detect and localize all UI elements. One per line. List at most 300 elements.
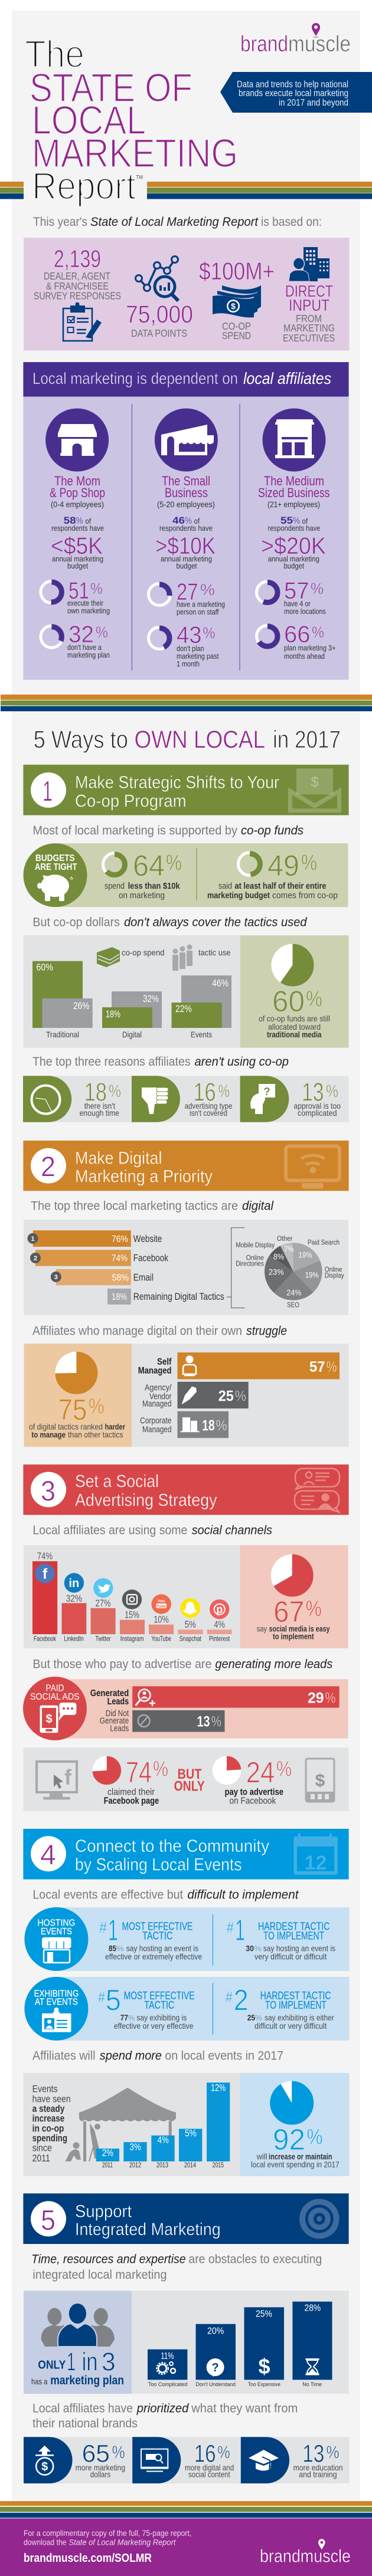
column: mom and pop shop: (0-4 employees) <box>51 500 104 509</box>
stat: co-op spend: $100M+ <box>199 257 275 285</box>
want: more marketing dollars <box>24 2437 125 2483</box>
stat: direct input: DIRECT <box>285 282 333 300</box>
bar chart: top tactics: 74% <box>112 1254 128 1264</box>
bars: traditional: 60% <box>37 962 53 973</box>
bar: instagram <box>120 1589 145 1643</box>
column: mom and pop shop: & Pop Shop <box>50 485 105 500</box>
subheading: tactics used: But co-op dollars <box>32 916 120 929</box>
text: download call to action: For a complimentary copy of the full, 75-page report, <box>24 2528 191 2538</box>
icon: tablet with dollar <box>306 1759 334 1802</box>
panel: 92 percent increase or maintain <box>240 2073 350 2176</box>
bar: pinterest: p <box>216 1604 223 1615</box>
panel: only 1 in 3 <box>24 2291 132 2394</box>
subheading: co-op funds: co-op funds <box>241 824 304 837</box>
stat: 27 percent: person on staff <box>177 607 219 616</box>
stat: #1 hardest tactic: 1 <box>235 1914 245 1947</box>
section 3 banner: Advertising Strategy <box>75 1490 217 1510</box>
subheading: spend more: Affiliates will <box>32 2049 96 2063</box>
stat: co-op spend: SPEND <box>222 330 251 341</box>
bar chart: top tactics: Website <box>133 1233 162 1244</box>
bar: generated leads <box>90 1686 340 1708</box>
panel: 92 percent increase or maintain: % <box>307 2125 322 2149</box>
subheading: prioritized: their national brands <box>32 2417 138 2430</box>
bar chart: top tactics: Email <box>133 1272 154 1283</box>
bar: snapchat: 5% <box>185 1619 196 1630</box>
subheading: digital struggle: struggle <box>246 1324 287 1338</box>
panel: exhibiting at events <box>24 1977 349 2041</box>
stat: #1 hardest tactic: very difficult or difficult <box>254 1951 327 1961</box>
bar: too expensive: 25% <box>256 2309 272 2319</box>
heading: local affiliates: Local marketing is dependent on <box>32 369 238 387</box>
stat: 66 percent: months ahead <box>284 652 325 661</box>
panel: top tactics <box>24 1220 348 1315</box>
stat: #5 most effective <box>98 1983 195 2030</box>
pie: remaining digital tactics: Mobile Display <box>236 1241 275 1249</box>
column: mom and pop shop: <$5K <box>51 533 103 559</box>
icon: question bubble: ? <box>211 2361 219 2374</box>
bars: events: Events <box>191 1030 212 1039</box>
column: medium sized business <box>256 408 335 661</box>
bar: too complicated <box>148 2350 187 2388</box>
stat: 43 percent: 43 <box>177 622 202 648</box>
reason: not enough time: % <box>109 1082 121 1101</box>
stat: 51 percent: % <box>90 580 103 597</box>
stat: #1 most effective: # <box>99 1918 107 1936</box>
stat: #2 hardest tactic: TO IMPLEMENT <box>265 1999 327 2011</box>
section 1 banner: 1 <box>43 776 53 807</box>
subheading: reasons not using co-op: aren't using co-op <box>195 1055 289 1069</box>
text: steady increase: have seen <box>32 2093 71 2104</box>
column: small business: respondents have <box>159 524 213 533</box>
panel: paid social ads <box>23 1677 348 1740</box>
section 5 banner: 5 <box>41 2205 56 2236</box>
subheading: tactics used: don't always cover the tactics used <box>124 916 308 929</box>
pie: remaining digital tactics: Other <box>277 1234 292 1243</box>
stat: 64 percent <box>103 849 182 901</box>
badge: hosting events: HOSTING <box>38 1918 75 1928</box>
stat: #5 most effective: % <box>128 2013 135 2022</box>
stat: 74 percent claimed <box>92 1756 168 1806</box>
column: medium sized business: (21+ employees) <box>267 500 320 509</box>
title: STATE OF <box>30 65 192 110</box>
subheading: co-op funds: Most of local marketing is supported by <box>32 824 237 837</box>
bar chart: co-op spending by year: 2013 <box>156 2162 168 2169</box>
icon: piggy bank <box>37 875 73 901</box>
subheading: social channels <box>32 1524 272 1537</box>
stat: 32 percent: marketing plan <box>67 650 110 659</box>
section 5 banner: Support <box>75 2202 132 2221</box>
stat: direct input: MARKETING <box>283 322 335 334</box>
column: mom and pop shop: of <box>85 517 91 525</box>
stat: 32 percent: % <box>96 623 108 641</box>
badge: hosting events: EVENTS <box>41 1927 72 1937</box>
title: The <box>25 32 84 75</box>
reason: advertising type not covered: isn't covered <box>190 1108 227 1118</box>
stat: 32 percent: don't have a <box>67 643 102 652</box>
want: more marketing dollars: more marketing <box>76 2463 125 2472</box>
panel: 75 percent harder to manage: of digital tactics ranked <box>29 1422 103 1431</box>
badge: budgets are tight: ARE TIGHT <box>35 862 77 872</box>
stat: #1 most effective <box>99 1914 202 1961</box>
bar: agency managed: Agency/ <box>145 1384 172 1393</box>
callout banner: in 2017 and beyond <box>279 98 348 108</box>
icon: tablet with dollar: $ <box>315 1771 325 1790</box>
subheading: obstacles <box>31 2253 322 2282</box>
stat: #2 hardest tactic: difficult or very difficult <box>254 2021 327 2030</box>
bar: agency managed: 25 <box>218 1388 234 1405</box>
bar: youtube <box>149 1594 174 1643</box>
bar: don't understand <box>196 2324 236 2388</box>
bars: digital: Digital <box>122 1030 142 1039</box>
stat: #5 most effective: # <box>98 1988 105 2006</box>
icon: no symbol <box>138 1715 150 1727</box>
stat: #5 most effective: 77 <box>120 2013 128 2022</box>
want: more education and training: % <box>326 2443 340 2462</box>
bar chart: top tactics: 3 <box>54 1274 58 1281</box>
pie: remaining digital tactics: 7% <box>284 1244 293 1254</box>
reason: advertising type not covered: % <box>218 1082 230 1101</box>
want: more education and training: 13 <box>302 2439 324 2467</box>
bar: too complicated: 11% <box>161 2351 174 2361</box>
pie: remaining digital tactics: 8% <box>273 1252 284 1261</box>
bar: snapchat <box>178 1598 203 1643</box>
icon: hourglass <box>306 2358 319 2375</box>
icon: pen <box>182 1386 197 1405</box>
panel: only 1 in 3: 1 <box>67 2347 76 2376</box>
bar: facebook: 74% <box>37 1550 53 1562</box>
bar: agency managed: Managed <box>142 1399 171 1409</box>
stat: 24 percent pay: 24 <box>246 1756 275 1789</box>
stat: direct input: INPUT <box>289 296 329 314</box>
reason: approval too complicated: % <box>326 1082 338 1101</box>
bar: youtube: YouTube <box>151 1635 171 1643</box>
illustration: event tent <box>65 2088 176 2161</box>
icon: executive and buildings <box>289 247 329 281</box>
bars: digital: 18% <box>106 1008 120 1020</box>
stat: data points: DATA POINTS <box>131 327 187 339</box>
icon: calendar <box>293 1834 338 1875</box>
text: steady increase: a steady <box>32 2103 65 2114</box>
bar: don't understand: 20% <box>207 2326 224 2336</box>
pie: 92 percent <box>270 2081 314 2125</box>
subheading: spend more: on local events in 2017 <box>165 2049 283 2063</box>
panel: who manages digital <box>132 1343 349 1447</box>
bar: corporate managed: Corporate <box>140 1416 171 1425</box>
panel: obstacles bar chart <box>132 2291 349 2394</box>
bars: traditional: Traditional <box>46 1030 79 1039</box>
pie: remaining digital tactics: Online <box>246 1254 264 1262</box>
panel: only 1 in 3: ONLY <box>38 2359 66 2372</box>
subheading: prioritized: Local affiliates have <box>32 2402 133 2416</box>
stat: direct input: EXECUTIVES <box>283 332 335 344</box>
want: more digital and social content: more digital and <box>185 2463 234 2472</box>
stripes: footer <box>0 2501 372 2518</box>
stat: #5 most effective: 5 <box>106 1983 121 2016</box>
pie: remaining digital tactics: Paid Search <box>308 1238 340 1247</box>
reason: approval too complicated <box>240 1076 341 1122</box>
icon: chat bubbles <box>295 1468 340 1512</box>
column: medium sized business: of <box>302 517 308 525</box>
bar chart: top tactics: Remaining Digital Tactics <box>133 1291 224 1302</box>
bar: did not generate leads: Did Not <box>106 1709 129 1719</box>
stat: 49 percent: 49 <box>267 849 299 882</box>
icon: facebook monitor <box>35 1762 78 1800</box>
panel: 60 percent traditional media: % <box>306 987 322 1011</box>
icon: money stack: $ <box>231 301 236 311</box>
bar: did not generate leads: 13 <box>197 1714 210 1730</box>
section 2 banner: Marketing a Priority <box>75 1167 213 1186</box>
legend: co-op spend: co-op spend <box>122 948 164 957</box>
stat: survey responses: DEALER, AGENT <box>44 270 110 282</box>
stat: #2 hardest tactic: HARDEST TACTIC <box>260 1990 331 2002</box>
panel: 60 percent traditional media: allocated toward <box>268 1022 321 1031</box>
bar: don't understand: Don't Understand <box>196 2381 236 2388</box>
want: more marketing dollars: $ <box>41 2460 48 2473</box>
column: small business: Business <box>165 485 208 500</box>
section 5 banner <box>23 2193 349 2244</box>
stat: #5 most effective: MOST EFFECTIVE <box>124 1990 195 2002</box>
icon: three people <box>41 2304 115 2347</box>
icon: corporate building <box>180 1417 199 1432</box>
subheading: generating leads: generating more leads <box>215 1657 333 1671</box>
stat: #1 most effective: MOST EFFECTIVE <box>122 1921 192 1933</box>
section 3 banner <box>23 1464 349 1515</box>
bar: youtube: Tube <box>156 1605 166 1609</box>
section 3 banner: Set a Social <box>75 1472 159 1491</box>
want: more digital and social content <box>132 2437 234 2483</box>
text: steady increase: in co-op <box>32 2122 64 2134</box>
panel: facebook claimed vs paid <box>23 1747 349 1811</box>
stat: survey responses: & FRANCHISEE <box>46 280 109 292</box>
stat: 51 percent: 51 <box>68 578 89 604</box>
stat: 74 percent claimed: 74 <box>126 1756 152 1789</box>
reason: advertising type not covered <box>132 1076 233 1122</box>
stat: 43 percent: don't plan <box>177 644 204 653</box>
text: download call to action: brandmuscle.com/SOLMR <box>24 2552 152 2565</box>
stat: #1 most effective: say hosting an event is <box>126 1943 198 1953</box>
subheading: digital tactics: digital <box>242 1200 274 1213</box>
bar: self managed: Self <box>157 1357 172 1367</box>
bar chart: co-op spending by year: 2015 <box>213 2162 224 2169</box>
panel: only 1 in 3: in <box>82 2347 98 2376</box>
icon: person at laptop <box>183 1355 196 1376</box>
badge: budgets are tight: BUDGETS <box>35 853 75 863</box>
subheading: prioritized: what they want from <box>191 2402 298 2416</box>
bar: twitter: 27% <box>96 1598 111 1609</box>
legend: tactic use <box>172 945 231 971</box>
bar chart: top tactics: 58% <box>112 1273 129 1283</box>
bar: facebook: Facebook <box>34 1635 57 1643</box>
section 1 banner <box>23 765 349 815</box>
stat: #1 most effective: % <box>116 1944 124 1953</box>
column: mom and pop shop: respondents have <box>51 524 104 533</box>
callout banner <box>220 72 372 113</box>
bar chart: co-op spending by year: 3% <box>129 2141 141 2153</box>
want: more marketing dollars: % <box>112 2443 125 2462</box>
bars: events: 46% <box>212 978 229 989</box>
bars: digital <box>102 991 162 1039</box>
icon: facebook monitor: f <box>64 1765 72 1789</box>
heading: 5 ways to own local <box>34 725 341 753</box>
column: medium sized business: 55 <box>280 515 293 526</box>
stat: 64 percent: less than $10k <box>128 881 180 891</box>
logo: brandmuscle <box>240 23 351 57</box>
reason: not enough time: there isn't <box>84 1101 115 1110</box>
text: steady increase: 2011 <box>32 2153 50 2164</box>
stat: #5 most effective: effective or very effective <box>114 2021 194 2030</box>
logo: brandmuscle white: brandmuscle <box>260 2545 351 2566</box>
bar: pinterest <box>207 1599 232 1643</box>
panel: 75 percent harder to manage: to manage <box>31 1430 66 1440</box>
bar: corporate managed: % <box>216 1418 227 1434</box>
title <box>25 32 238 208</box>
column: mom and pop shop: annual marketing <box>52 554 103 563</box>
stat: #1 hardest tactic: 30 <box>246 1943 254 1953</box>
intro sentence: State of Local Marketing Report <box>90 215 259 229</box>
stat: 32 percent <box>41 622 110 659</box>
subheading: reasons not using co-op: The top three reasons affiliates <box>32 1055 191 1069</box>
reason: approval too complicated: 13 <box>302 1078 324 1107</box>
badge: exhibiting at events: EXHIBITING <box>34 1989 79 1999</box>
stat: data points: 75,000 <box>126 300 193 328</box>
column: mom and pop shop: budget <box>67 561 88 570</box>
bar: self managed: Managed <box>138 1366 171 1376</box>
pie: remaining digital tactics: Directories <box>236 1260 264 1268</box>
stat: co-op spend: CO-OP <box>222 320 251 332</box>
bar: no time: 28% <box>305 2303 321 2313</box>
pie: 67 percent <box>271 1555 314 1597</box>
bar: linkedin: in <box>69 1577 79 1590</box>
stat: data points <box>126 300 193 339</box>
panel: 67 percent easy to implement: % <box>306 1596 322 1621</box>
column: medium sized business: The Medium <box>264 474 324 488</box>
section 3 banner: 3 <box>41 1476 56 1507</box>
want: more education and training <box>241 2437 343 2483</box>
section 2 banner: 2 <box>41 1151 56 1182</box>
bar: did not generate leads: Generate <box>100 1717 129 1726</box>
stat: #2 hardest tactic: 2 <box>234 1983 249 2016</box>
bar: snapchat: Snapchat <box>180 1635 201 1643</box>
stat: 27 percent: 27 <box>177 579 198 605</box>
bars: events: 22% <box>175 1003 192 1014</box>
stat: #2 hardest tactic: say exhibiting is either <box>265 2013 334 2022</box>
callout banner: Data and trends to help national <box>237 80 348 90</box>
intro sentence: This year's <box>33 215 87 229</box>
panel: 75 percent harder to manage: harder <box>105 1422 125 1431</box>
section 4 banner: by Scaling Local Events <box>75 1855 242 1875</box>
pie: remaining digital tactics: SEO <box>287 1301 299 1309</box>
bar chart: top tactics: Facebook <box>133 1253 168 1264</box>
bar: too complicated: Too Complicated <box>148 2381 187 2388</box>
header <box>0 23 372 208</box>
reason: not enough time: 18 <box>84 1078 107 1107</box>
bar: self managed: % <box>326 1359 337 1375</box>
bar: facebook <box>32 1550 57 1643</box>
stat: 49 percent: said <box>218 881 232 891</box>
want: more digital and social content: social content <box>188 2470 230 2479</box>
heading: local affiliates: local affiliates <box>243 369 331 387</box>
column: medium sized business: annual marketing <box>268 554 319 563</box>
title: TM <box>136 175 143 180</box>
pie: remaining digital tactics: 19% <box>305 1270 319 1280</box>
panel: 92 percent increase or maintain: 92 <box>273 2123 305 2156</box>
subheading: difficult to implement <box>32 1888 299 1901</box>
panel: 67 percent easy to implement: social media is easy <box>269 1624 330 1634</box>
pie: remaining digital tactics: 24% <box>286 1288 301 1297</box>
logo: brandmuscle: brand <box>240 32 288 57</box>
stat: 57 percent: more locations <box>284 607 326 616</box>
heading: 5 ways to own local: OWN LOCAL <box>135 725 265 753</box>
bar: self managed <box>138 1352 340 1379</box>
column: small business: 46 <box>172 515 185 526</box>
want: more digital and social content: % <box>217 2443 230 2462</box>
column: medium sized business: Sized Business <box>258 485 329 500</box>
bar: pinterest: 4% <box>214 1619 225 1630</box>
panel: business sizes <box>23 397 349 680</box>
legend: co-op spend <box>97 947 164 967</box>
column: small business <box>149 408 225 668</box>
want: more education and training: more education <box>293 2463 343 2472</box>
icon: wifi monitor <box>286 1146 340 1189</box>
bar: agency managed <box>142 1382 249 1409</box>
stat: #5 most effective: TACTIC <box>144 1999 174 2011</box>
stat: survey responses <box>34 245 121 302</box>
panel: what affiliates want <box>24 2437 350 2483</box>
column: mom and pop shop: 58 <box>64 515 76 526</box>
panel: 60 percent traditional media: 60 <box>272 985 305 1018</box>
stat: 57 percent: have 4 or <box>284 599 311 608</box>
panel: three reasons <box>23 1076 349 1122</box>
icon: clipboard <box>63 302 102 341</box>
badge: exhibiting at events: AT EVENTS <box>35 1997 78 2007</box>
bar: no time <box>292 2302 332 2388</box>
section 5 banner: Integrated Marketing <box>75 2220 221 2239</box>
logo: brandmuscle white <box>260 2539 351 2566</box>
bar: too expensive <box>244 2307 284 2388</box>
panel: 67 percent easy to implement: to implement <box>273 1631 314 1641</box>
stat: direct input: FROM <box>296 313 322 324</box>
subheading: spend more: spend more <box>100 2049 162 2063</box>
badge: budgets are tight <box>24 843 87 907</box>
bars: traditional: 26% <box>73 1000 90 1011</box>
subheading: social channels: social channels <box>192 1524 272 1537</box>
panel: 67 percent easy to implement: say <box>257 1624 267 1634</box>
stat: 49 percent: marketing budget <box>207 891 270 901</box>
icon: calendar: 12 <box>305 1852 327 1874</box>
stat: 43 percent: 1 month <box>177 659 200 668</box>
column: small business: of <box>194 517 200 525</box>
bar: generated leads: Leads <box>107 1697 129 1707</box>
want: more marketing dollars: dollars <box>90 2470 110 2479</box>
subheading: prioritized <box>32 2402 298 2430</box>
pie: remaining digital tactics <box>236 1234 344 1309</box>
subheading: obstacles: Time, resources and expertise <box>31 2253 186 2266</box>
bars: events <box>171 975 231 1039</box>
bar: linkedin: 32% <box>66 1593 82 1604</box>
panel: 75 percent harder to manage: 75 <box>58 1394 87 1427</box>
panel: budgets are tight <box>24 843 348 907</box>
subheading: difficult to implement: Local events are effective but <box>32 1888 183 1901</box>
subheading: tactics used <box>32 916 308 929</box>
stat: #1 hardest tactic: # <box>227 1918 234 1936</box>
bar: did not generate leads: % <box>211 1714 221 1730</box>
bar: twitter: Twitter <box>96 1635 111 1643</box>
icon: phone with dollar: $ <box>45 1713 53 1726</box>
column: medium sized business: budget <box>283 561 304 570</box>
subheading: difficult to implement: difficult to implement <box>187 1888 299 1901</box>
badge: paid social ads: SOCIAL ADS <box>30 1692 80 1702</box>
stat: 24 percent pay <box>213 1756 292 1806</box>
